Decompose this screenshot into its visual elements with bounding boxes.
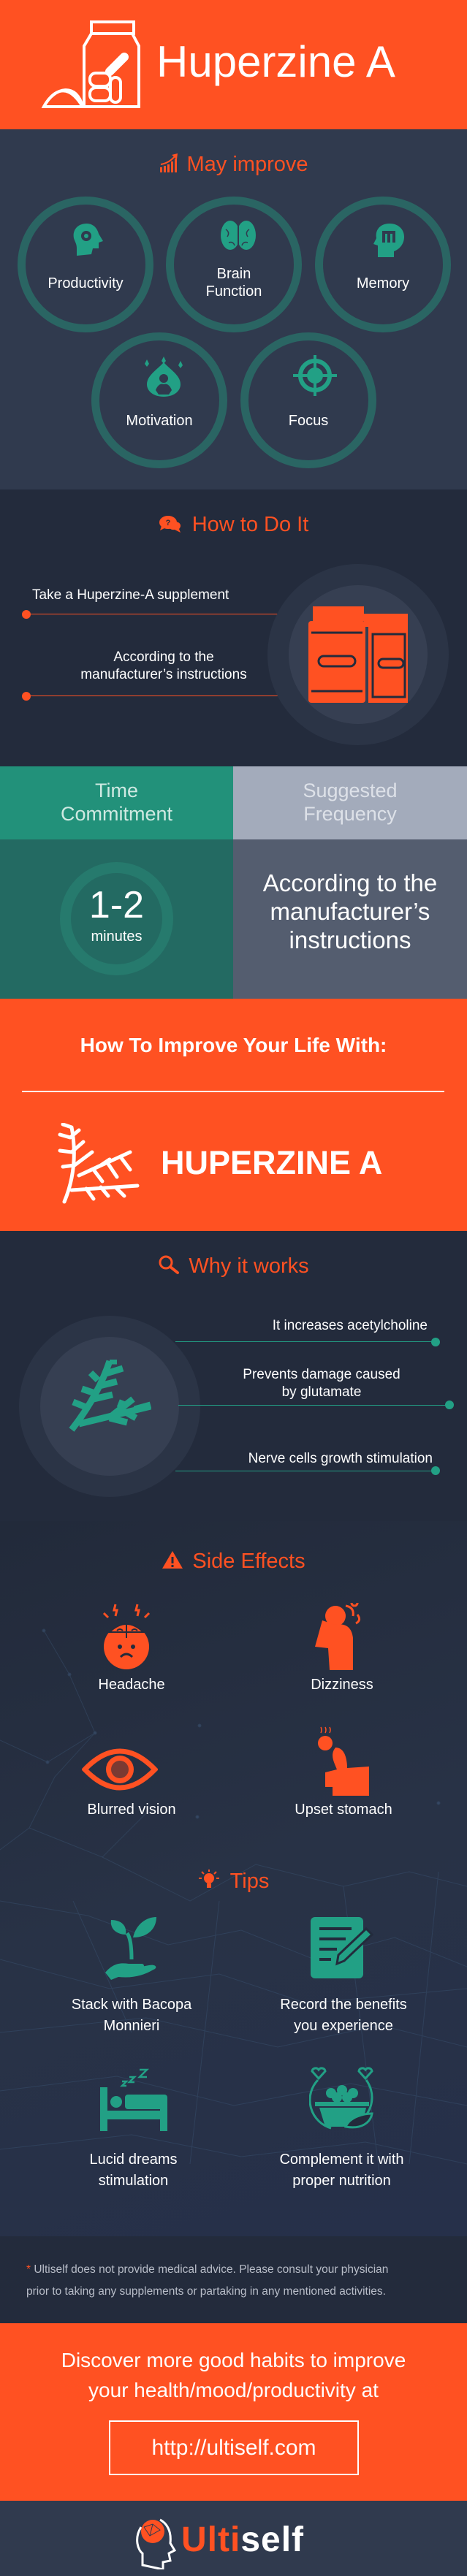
icon: supplement bottles in circle — [267, 564, 449, 745]
side effect: dizziness: Dizziness — [311, 1677, 373, 1693]
tip: lucid dreams — [89, 2069, 178, 2189]
tip: record benefits: you experience — [294, 2018, 393, 2034]
url button: http://ultiself.com — [151, 2436, 316, 2460]
tip: record benefits — [280, 1917, 407, 2034]
tip: bacopa — [72, 1917, 191, 2034]
footer — [0, 2501, 467, 2576]
value: frequency — [233, 839, 467, 999]
side effect: upset stomach: Upset stomach — [295, 1802, 392, 1818]
benefit: brain function: Function — [206, 283, 262, 300]
side effect: upset stomach — [295, 1727, 392, 1818]
cta text: your health/mood/productivity at — [88, 2379, 379, 2401]
benefit: focus — [240, 332, 376, 468]
heading: tips: Tips — [230, 1870, 269, 1893]
benefit: productivity: Productivity — [48, 275, 124, 291]
reason 2: Prevents damage caused — [243, 1367, 400, 1382]
heading: huperzine a: HUPERZINE A — [161, 1144, 382, 1181]
disclaimer: * Ultiself does not provide medical advice. Please consult your physician — [26, 2263, 388, 2276]
tip: lucid dreams: stimulation — [99, 2173, 168, 2189]
reason 3 — [175, 1451, 440, 1475]
benefit: brain function — [166, 197, 302, 332]
tip: proper nutrition: proper nutrition — [292, 2173, 391, 2189]
heading: tips — [199, 1870, 269, 1893]
heading: time commitment: Time — [95, 780, 138, 801]
tip: lucid dreams: Lucid dreams — [89, 2152, 178, 2168]
panel: side effects and tips — [0, 1521, 467, 2236]
reason 1 — [175, 1318, 440, 1346]
benefit: productivity — [18, 197, 153, 332]
panel: how to do it — [0, 489, 467, 766]
icon: club moss branch — [58, 1123, 139, 1204]
heading: how to do it: ? — [165, 519, 170, 527]
benefit: brain function: Brain — [217, 266, 251, 282]
logo — [136, 2519, 304, 2569]
value: frequency: manufacturer’s — [270, 898, 430, 925]
disclaimer: prior to taking any supplements or partaking in any mentioned activities. — [26, 2285, 386, 2298]
benefit: focus: Focus — [289, 413, 328, 429]
panel: why it works — [0, 1231, 467, 1521]
benefit: memory: Memory — [357, 275, 409, 291]
benefit: memory — [315, 197, 451, 332]
tip: proper nutrition — [279, 2067, 404, 2189]
reason 3: Nerve cells growth stimulation — [248, 1451, 433, 1466]
side effect: headache: Headache — [98, 1677, 165, 1693]
heading: suggested frequency: Frequency — [303, 803, 397, 825]
step 1 — [22, 587, 278, 619]
side effect: blurred vision — [82, 1749, 176, 1818]
title: Huperzine A — [156, 37, 395, 86]
value: 1-2 minutes: 1-2 — [89, 884, 144, 926]
panel: how to improve banner — [0, 999, 467, 1231]
heading: time commitment — [0, 766, 233, 839]
step 2: According to the — [113, 649, 214, 665]
benefit: motivation — [91, 332, 227, 468]
icon: branch in circle — [19, 1316, 200, 1497]
heading: time commitment: Commitment — [61, 803, 172, 825]
heading: how to do it: How to Do It — [192, 513, 308, 536]
heading: side effects: Side Effects — [192, 1550, 305, 1573]
side effect: headache — [98, 1604, 165, 1693]
side effect: dizziness — [311, 1603, 373, 1693]
value: 1-2 minutes — [0, 839, 233, 999]
step 2: manufacturer’s instructions — [80, 667, 247, 682]
logo: Ultiself — [181, 2520, 304, 2559]
panel: call to action — [0, 2323, 467, 2501]
tip: bacopa: Stack with Bacopa — [72, 1997, 191, 2013]
heading: how to improve: How To Improve Your Life With: — [80, 1034, 387, 1056]
step 1: Take a Huperzine-A supplement — [32, 587, 229, 603]
disclaimer — [26, 2263, 388, 2298]
panel: time commitment — [0, 766, 233, 999]
header — [0, 0, 467, 129]
heading: why it works: Why it works — [189, 1254, 309, 1278]
tip: bacopa: Monnieri — [104, 2018, 159, 2034]
icon: brain head — [136, 2519, 176, 2569]
value: frequency: According to the — [263, 869, 437, 896]
cta text: Discover more good habits to improve — [61, 2349, 406, 2371]
step 2 — [22, 649, 278, 701]
value: frequency: instructions — [289, 926, 411, 953]
tip: proper nutrition: Complement it with — [279, 2152, 404, 2168]
panel: suggested frequency — [233, 766, 467, 999]
reason 1: It increases acetylcholine — [273, 1318, 428, 1333]
cta text — [61, 2349, 406, 2401]
panel: may improve — [0, 129, 467, 489]
benefit: motivation: Motivation — [126, 413, 193, 429]
tip: record benefits: Record the benefits — [280, 1997, 407, 2013]
reason 2 — [178, 1367, 454, 1409]
heading: may improve: May improve — [187, 153, 308, 176]
side effect: blurred vision: Blurred vision — [87, 1802, 176, 1818]
heading: suggested frequency — [233, 766, 467, 839]
url button — [109, 2420, 359, 2475]
value: 1-2 minutes: minutes — [91, 929, 143, 945]
icon: supplement jar with leaf — [41, 20, 140, 108]
heading: suggested frequency: Suggested — [303, 780, 398, 801]
reason 2: by glutamate — [282, 1384, 361, 1400]
